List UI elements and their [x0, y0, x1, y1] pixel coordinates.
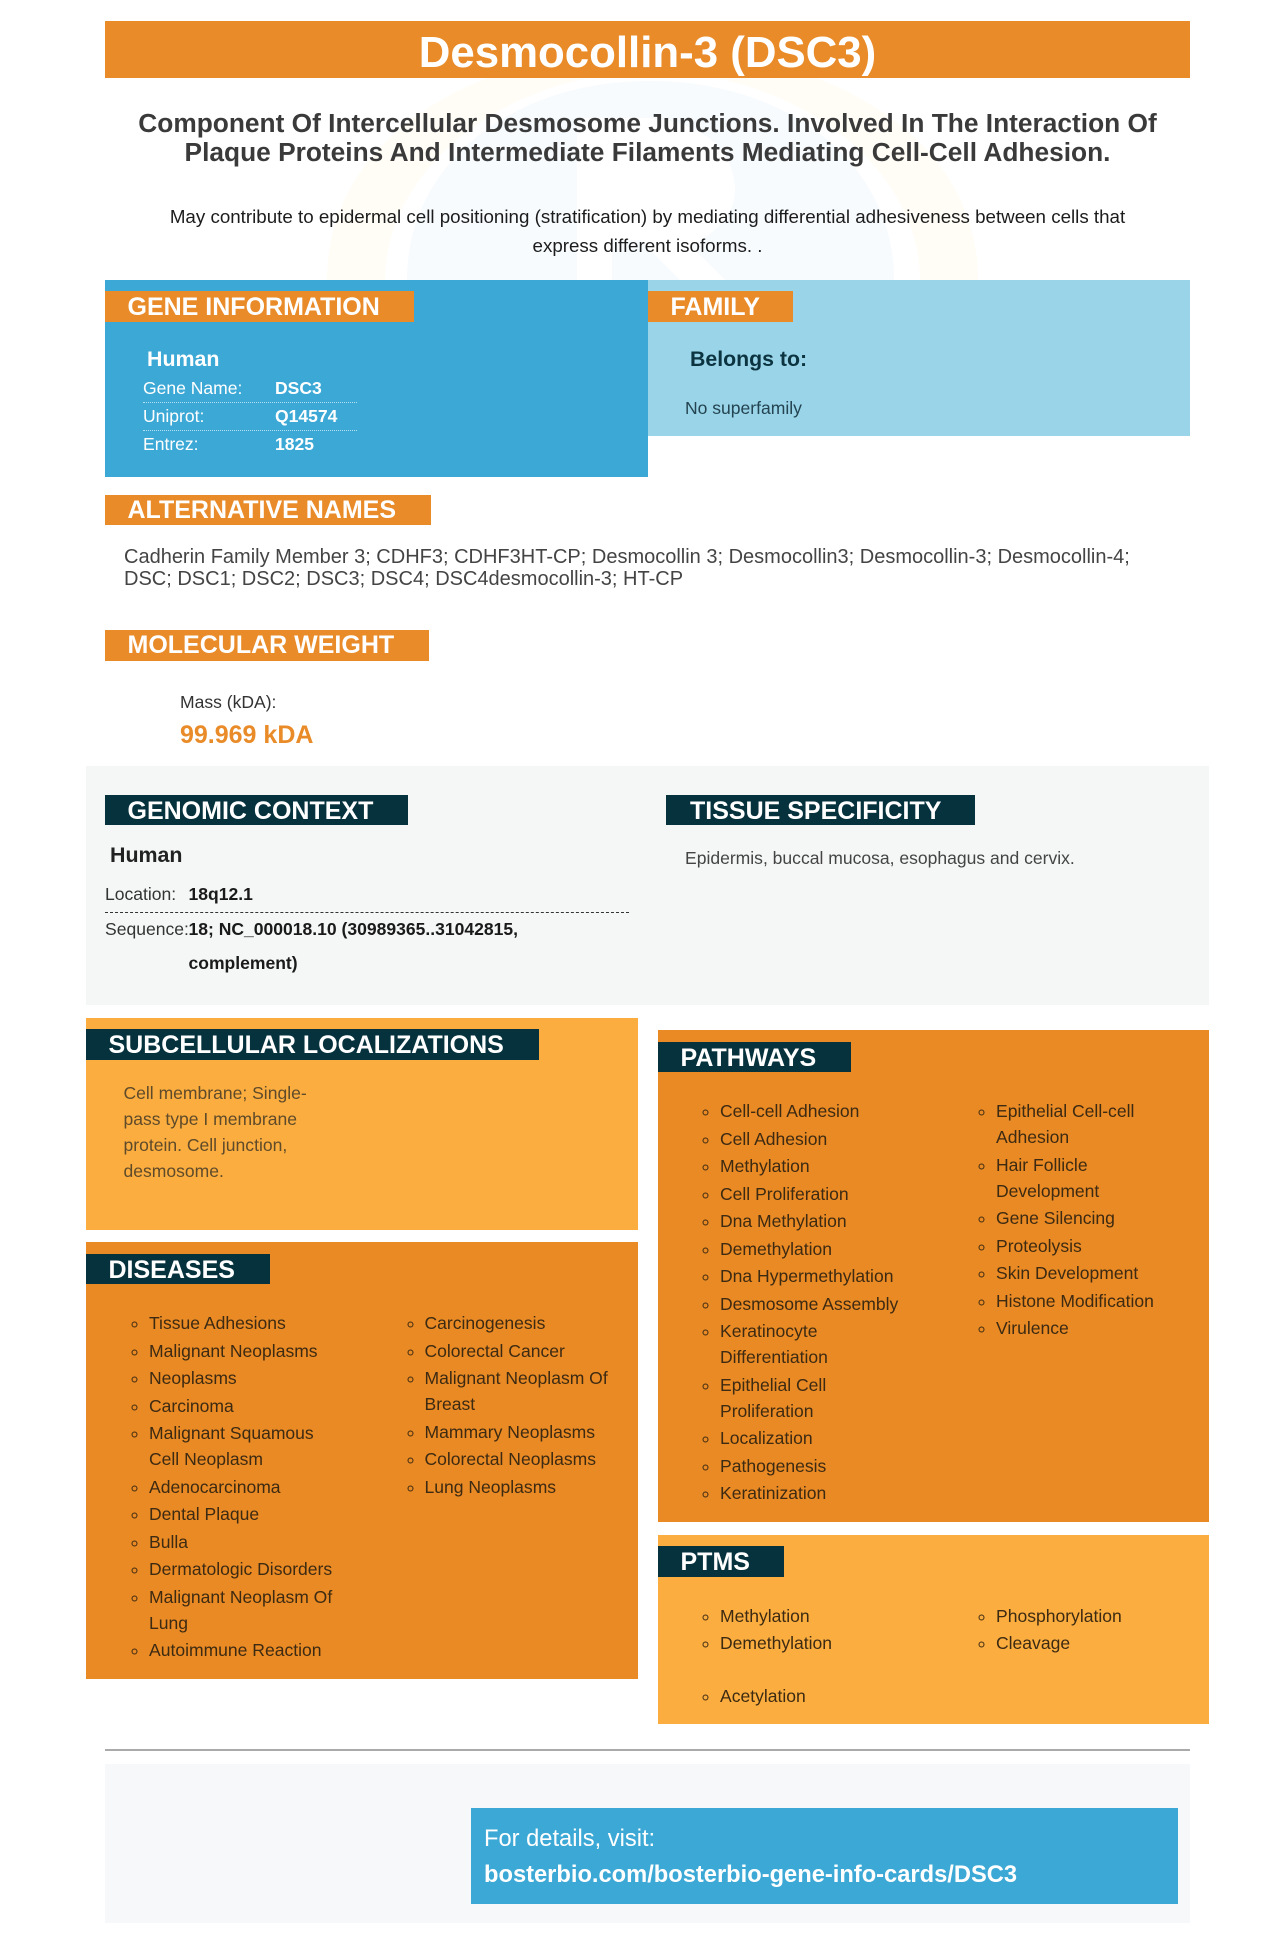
sequence row: Sequence: — [105, 919, 189, 939]
pathways list column 1: Dna Hypermethylation — [720, 1266, 893, 1286]
heading: family: FAMILY — [670, 293, 760, 321]
diseases list column 2: Malignant Neoplasm Of — [424, 1368, 608, 1388]
gene name row — [143, 378, 322, 398]
description: May contribute to epidermal cell positioning (stratification) by mediating differential adhesiveness between cells that — [170, 206, 1125, 227]
panel: gene information — [105, 280, 648, 477]
diseases list column 2: Colorectal Neoplasms — [424, 1449, 596, 1469]
title banner — [105, 21, 1190, 78]
panel: footer — [105, 1764, 1190, 1923]
heading: tissue specificity: TISSUE SPECIFICITY — [690, 797, 941, 825]
sequence row: 18; NC_000018.10 (30989365..31042815, — [188, 919, 518, 939]
diseases list column 1: Malignant Neoplasm Of — [149, 1586, 332, 1606]
pathways list column 1: Cell-cell Adhesion — [720, 1101, 859, 1121]
diseases list column 1: Malignant Neoplasms — [149, 1340, 318, 1360]
diseases list column 2: Mammary Neoplasms — [424, 1422, 595, 1442]
diseases list column 1: Dermatologic Disorders — [149, 1559, 332, 1579]
pathways list column 1: Epithelial Cell — [720, 1374, 826, 1394]
ptms list column 2: Phosphorylation — [996, 1606, 1122, 1626]
sequence row — [105, 919, 518, 973]
alternative names text: DSC; DSC1; DSC2; DSC3; DSC4; DSC4desmocollin-3; HT-CP — [124, 568, 683, 590]
panel: family — [648, 280, 1190, 436]
heading: pathways: PATHWAYS — [680, 1044, 816, 1072]
pathways list column 1: Cell Proliferation — [720, 1184, 849, 1204]
localization text — [124, 1083, 307, 1181]
title banner: Desmocollin-3 (DSC3) — [419, 28, 876, 77]
callout url: bosterbio.com/bosterbio-gene-info-cards/DSC3 — [484, 1862, 1017, 1888]
belongs to label: Belongs to: — [690, 346, 807, 370]
heading: subcellular localizations: SUBCELLULAR LOCALIZATIONS — [108, 1031, 504, 1059]
pathways list column 2: Virulence — [996, 1318, 1069, 1338]
pathways list column 2: Gene Silencing — [996, 1208, 1115, 1228]
heading: diseases — [86, 1254, 270, 1284]
heading: family — [648, 291, 793, 322]
family value: No superfamily — [685, 398, 802, 418]
diseases list column 2 — [408, 1313, 608, 1496]
pathways list column 2 — [978, 1101, 1154, 1338]
heading: ptms — [658, 1546, 784, 1577]
pathways list column 2: Skin Development — [996, 1263, 1138, 1283]
pathways list column 2: Epithelial Cell-cell — [996, 1101, 1134, 1121]
heading: gene information: GENE INFORMATION — [128, 293, 380, 321]
pathways list column 1: Demethylation — [720, 1238, 832, 1258]
alternative names text — [124, 546, 1130, 590]
diseases list column 1: Dental Plaque — [149, 1504, 259, 1524]
pathways list column 1 — [702, 1101, 898, 1503]
callout label: For details, visit: — [484, 1826, 655, 1852]
diseases list column 2: Colorectal Cancer — [424, 1340, 565, 1360]
pathways list column 2: Histone Modification — [996, 1290, 1154, 1310]
panel: genomic context and tissue specificity — [86, 766, 1209, 1004]
pathways list column 1: Differentiation — [720, 1347, 828, 1367]
ptms list column 1: Acetylation — [720, 1686, 806, 1706]
callout: details link — [471, 1808, 1178, 1904]
localization text: Cell membrane; Single- — [124, 1083, 307, 1103]
diseases list column 1: Autoimmune Reaction — [149, 1640, 321, 1660]
subtitle: Component Of Intercellular Desmosome Junctions. Involved In The Interaction Of — [138, 108, 1157, 138]
ptms list column 2: Cleavage — [996, 1632, 1070, 1652]
heading: genomic context: GENOMIC CONTEXT — [128, 797, 373, 825]
diseases list column 1 — [132, 1313, 332, 1660]
panel: pathways — [658, 1030, 1209, 1522]
background watermark logo — [327, 78, 978, 280]
location row — [105, 884, 253, 904]
entrez row: Entrez: — [143, 434, 199, 454]
localization text: protein. Cell junction, — [124, 1135, 287, 1155]
sequence row: complement) — [188, 953, 298, 973]
uniprot row: Uniprot: — [143, 406, 204, 426]
heading: ptms: PTMS — [680, 1548, 750, 1576]
entrez row: 1825 — [275, 434, 314, 454]
pathways list column 2: Adhesion — [996, 1127, 1069, 1147]
pathways list column 1: Pathogenesis — [720, 1456, 826, 1476]
mass label: Mass (kDA): — [180, 692, 276, 712]
location row: Location: — [105, 884, 176, 904]
heading: diseases: DISEASES — [108, 1256, 235, 1284]
description: express different isoforms. . — [533, 235, 762, 256]
diseases list column 1: Adenocarcinoma — [149, 1476, 281, 1496]
gene name row: Gene Name: — [143, 378, 242, 398]
heading: alternative names: ALTERNATIVE NAMES — [128, 496, 396, 524]
tissue specificity text: Epidermis, buccal mucosa, esophagus and cervix. — [685, 848, 1075, 868]
pathways list column 1: Dna Methylation — [720, 1211, 847, 1231]
mass value: 99.969 kDA — [180, 721, 313, 749]
diseases list column 1: Tissue Adhesions — [149, 1313, 286, 1333]
diseases list column 1: Carcinoma — [149, 1396, 234, 1416]
pathways list column 1: Keratinization — [720, 1483, 826, 1503]
species label: Human — [110, 843, 182, 867]
pathways list column 1: Keratinocyte — [720, 1321, 817, 1341]
diseases list column 2: Carcinogenesis — [424, 1313, 545, 1333]
pathways list column 1: Cell Adhesion — [720, 1128, 827, 1148]
diseases list column 1: Lung — [149, 1612, 188, 1632]
diseases list column 1: Neoplasms — [149, 1368, 237, 1388]
localization text: pass type I membrane — [124, 1109, 297, 1129]
diseases list column 2: Breast — [424, 1394, 475, 1414]
panel: subcellular localizations — [86, 1018, 638, 1230]
ptms list column 1 — [702, 1606, 832, 1706]
pathways list column 2: Proteolysis — [996, 1236, 1082, 1256]
heading: molecular weight: MOLECULAR WEIGHT — [128, 631, 394, 659]
description — [170, 206, 1126, 256]
heading: pathways — [658, 1042, 851, 1072]
species label: Human — [147, 346, 220, 370]
subtitle: Plaque Proteins And Intermediate Filaments Mediating Cell-Cell Adhesion. — [185, 137, 1110, 167]
uniprot row: Q14574 — [275, 406, 337, 426]
uniprot row — [143, 406, 338, 426]
pathways list column 1: Proliferation — [720, 1400, 814, 1420]
localization text: desmosome. — [124, 1161, 224, 1181]
ptms list column 1: Demethylation — [720, 1632, 832, 1652]
subtitle — [138, 108, 1157, 167]
diseases list column 1: Bulla — [149, 1532, 188, 1552]
diseases list column 2: Lung Neoplasms — [424, 1476, 556, 1496]
diseases list column 1: Malignant Squamous — [149, 1423, 314, 1443]
pathways list column 2: Development — [996, 1180, 1099, 1200]
panel: ptms — [658, 1535, 1209, 1724]
ptms list column 2 — [978, 1606, 1122, 1652]
pathways list column 1: Desmosome Assembly — [720, 1294, 898, 1314]
ptms list column 1: Methylation — [720, 1606, 810, 1626]
pathways list column 1: Localization — [720, 1428, 813, 1448]
entrez row — [143, 434, 314, 454]
pathways list column 1: Methylation — [720, 1156, 810, 1176]
pathways list column 2: Hair Follicle — [996, 1154, 1088, 1174]
gene name row: DSC3 — [275, 378, 322, 398]
location row: 18q12.1 — [188, 884, 253, 904]
alternative names text: Cadherin Family Member 3; CDHF3; CDHF3HT-CP; Desmocollin 3; Desmocollin3; Desmocollin-3; Desmocollin-4; — [124, 546, 1130, 568]
diseases list column 1: Cell Neoplasm — [149, 1449, 263, 1469]
panel: diseases — [86, 1242, 638, 1679]
